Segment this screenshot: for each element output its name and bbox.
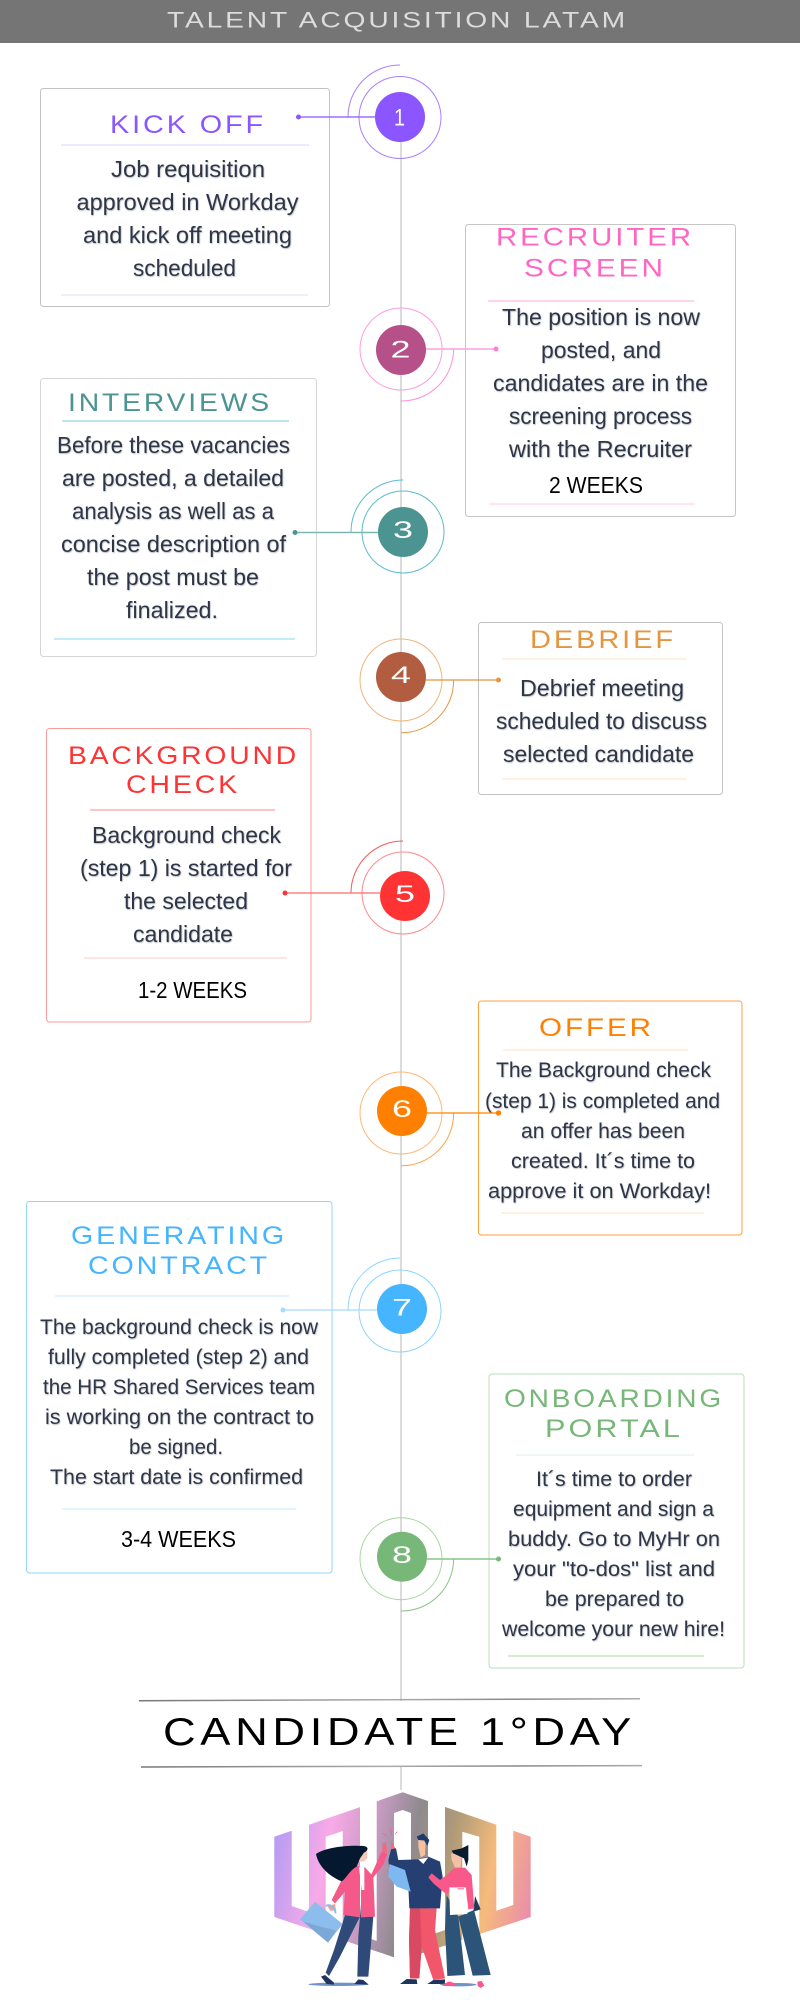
marker 6 <box>360 1072 501 1166</box>
heading: onboarding portal <box>504 1385 724 1443</box>
text block: debrief description <box>496 675 707 767</box>
text block: recruiter screen description: posted, and <box>541 337 661 363</box>
panel: onboarding portal <box>489 1374 744 1668</box>
text block: background check description <box>80 822 292 947</box>
text block: interviews description: concise description of <box>61 531 287 557</box>
text block: interviews description: are posted, a detailed <box>62 465 284 491</box>
marker 4 <box>360 639 501 733</box>
text block: kick off description: approved in Workday <box>76 189 299 215</box>
text block: interviews description: Before these vacancies <box>57 432 290 458</box>
text block: onboarding description: buddy. Go to MyHr on <box>508 1528 720 1551</box>
text block: background check description: candidate <box>133 921 233 947</box>
woman with briefcase <box>300 1828 397 1986</box>
text block: recruiter screen description: with the Recruiter <box>508 436 692 462</box>
text block: onboarding description: be prepared to <box>545 1588 684 1611</box>
heading: recruiter screen: RECRUITER <box>496 224 694 252</box>
heading: background check <box>68 742 299 799</box>
text block: onboarding description: your "to-dos" list and <box>513 1558 715 1581</box>
panel: kick off <box>40 88 330 306</box>
text block: generating contract description: fully completed (step 2) and <box>48 1346 309 1369</box>
text block: debrief description: scheduled to discuss <box>496 708 707 734</box>
heading: generating contract: CONTRACT <box>88 1252 270 1280</box>
timeline axis <box>400 117 402 1790</box>
panel: offer <box>478 1001 742 1235</box>
marker 7 <box>280 1258 441 1352</box>
marker 2 <box>360 308 498 401</box>
marker 5 <box>282 841 444 934</box>
marker 1: 1 <box>394 104 405 132</box>
text block: onboarding description: equipment and sign a <box>513 1498 714 1521</box>
illustration: team high five with logo <box>274 1792 531 1988</box>
duration: 3-4 weeks: 3-4 WEEKS <box>121 1526 236 1552</box>
text block: interviews description: analysis as well as a <box>72 498 274 524</box>
header title: TALENT ACQUISITION LATAM <box>167 8 628 32</box>
duration: 2 weeks: 2 WEEKS <box>549 472 643 498</box>
text block: interviews description: the post must be <box>87 564 259 590</box>
heading: recruiter screen <box>496 224 694 282</box>
duration: 1-2 weeks: 1-2 WEEKS <box>138 977 247 1003</box>
text block: kick off description: and kick off meeting <box>83 222 292 248</box>
marker 2: 2 <box>390 336 410 364</box>
panel: recruiter screen <box>466 224 736 516</box>
text block: offer description: (step 1) is completed and <box>485 1090 720 1113</box>
panel: interviews <box>40 378 316 656</box>
text block: offer description <box>485 1059 720 1203</box>
text block: generating contract description: The background check is now <box>40 1316 319 1339</box>
text block: interviews description: finalized. <box>126 597 218 623</box>
heading: generating contract <box>71 1222 287 1280</box>
marker 8 <box>360 1518 501 1611</box>
heading: background check: CHECK <box>126 771 240 799</box>
panel: debrief <box>478 622 722 794</box>
heading: kick off: KICK OFF <box>110 111 266 139</box>
panel: background check <box>46 728 311 1022</box>
marker 7: 7 <box>392 1294 412 1322</box>
woman with notepad <box>428 1845 491 1988</box>
text block: onboarding description <box>501 1468 725 1641</box>
candidate first day banner <box>139 1699 642 1767</box>
text block: onboarding description: It´s time to order <box>536 1468 692 1491</box>
marker 3 <box>292 480 444 573</box>
marker 1 <box>296 65 441 158</box>
text block: generating contract description: be signed. <box>129 1436 223 1459</box>
panel: generating contract <box>26 1202 332 1573</box>
text block: background check description: Background check <box>92 822 281 848</box>
heading: generating contract: GENERATING <box>71 1222 287 1250</box>
text block: kick off description <box>76 156 299 281</box>
marker 4: 4 <box>391 662 411 689</box>
heading: offer: OFFER <box>539 1014 654 1042</box>
text block: recruiter screen description <box>493 304 708 462</box>
marker 3: 3 <box>393 517 413 544</box>
header bar <box>0 0 800 43</box>
text block: offer description: an offer has been <box>521 1120 685 1143</box>
heading: interviews: INTERVIEWS <box>68 389 272 417</box>
heading: onboarding portal: ONBOARDING <box>504 1385 724 1413</box>
marker 5: 5 <box>395 881 415 908</box>
text block: generating contract description: The start date is confirmed <box>50 1466 303 1489</box>
text block: recruiter screen description: candidates are in the <box>493 370 708 396</box>
text block: debrief description: Debrief meeting <box>520 675 684 701</box>
text block: generating contract description: is working on the contract to <box>45 1406 314 1429</box>
marker 6: 6 <box>392 1096 412 1123</box>
text block: interviews description <box>57 432 290 623</box>
text block: generating contract description <box>40 1316 319 1489</box>
text block: debrief description: selected candidate <box>503 741 694 767</box>
heading: background check: BACKGROUND <box>68 742 299 770</box>
text block: kick off description: Job requisition <box>111 156 265 182</box>
heading: debrief: DEBRIEF <box>530 626 676 654</box>
text block: offer description: The Background check <box>496 1059 711 1082</box>
text block: background check description: the selected <box>124 888 248 914</box>
man with tablet <box>388 1833 445 1984</box>
text block: generating contract description: the HR Shared Services team <box>43 1376 315 1399</box>
marker 8: 8 <box>392 1542 412 1569</box>
heading: onboarding portal: PORTAL <box>545 1415 683 1443</box>
banner title: CANDIDATE 1°DAY <box>163 1711 636 1754</box>
text block: offer description: created. It´s time to <box>511 1150 695 1173</box>
text block: offer description: approve it on Workday! <box>488 1180 711 1203</box>
text block: kick off description: scheduled <box>133 255 236 281</box>
logo backdrop <box>274 1792 531 1970</box>
heading: recruiter screen: SCREEN <box>524 254 666 282</box>
text block: background check description: (step 1) is started for <box>80 855 292 881</box>
text block: recruiter screen description: screening process <box>509 403 692 429</box>
text block: recruiter screen description: The position is now <box>502 304 700 330</box>
text block: onboarding description: welcome your new hire! <box>501 1618 725 1641</box>
